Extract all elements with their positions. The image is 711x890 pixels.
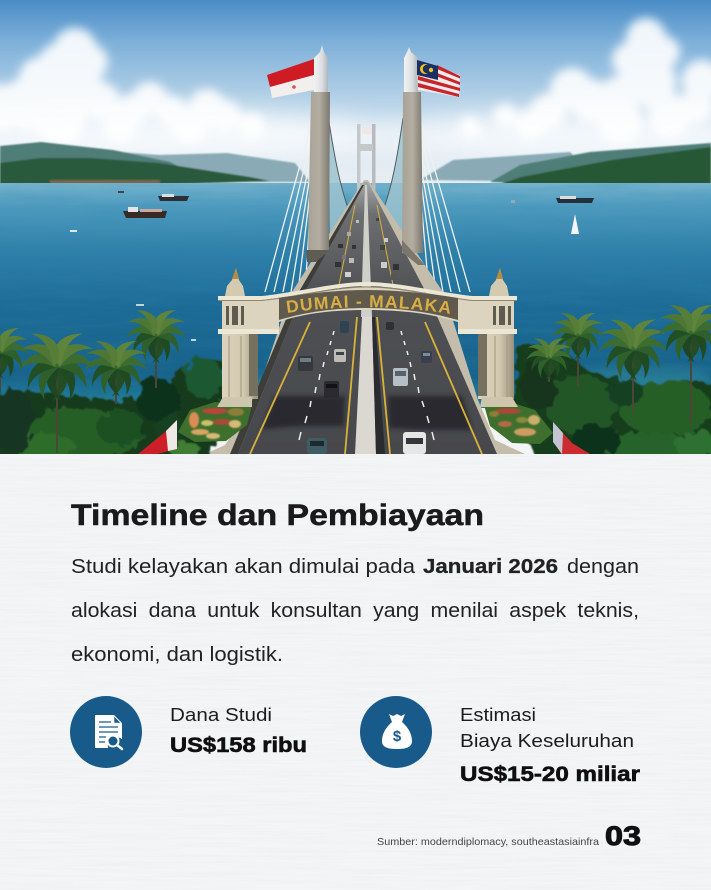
body text: ekonomi, dan logistik. [71, 644, 283, 666]
page number: 03 [605, 821, 641, 851]
paper panel [0, 454, 711, 890]
foreground foliage right [514, 345, 711, 475]
clouds [0, 18, 711, 157]
left pier [217, 333, 258, 407]
icon: money bag: $ [393, 728, 402, 745]
body text: Januari 2026 [423, 556, 558, 578]
cars [298, 218, 432, 454]
label: Estimasi [460, 705, 536, 725]
gateway arch [217, 268, 518, 407]
sign text [287, 307, 451, 314]
hero photo: bridge scene [0, 0, 711, 454]
value: US$158 ribu [170, 734, 307, 757]
foreground foliage left [0, 358, 224, 475]
flag: Indonesia [267, 59, 314, 98]
right pier [478, 333, 518, 407]
source: Sumber: moderndiplomacy, southeastasiainfra [377, 836, 599, 848]
finials [225, 268, 509, 296]
gateway arch: DUMAI - MALAKA [286, 295, 450, 314]
body text: Studi kelayakan akan dimulai pada [71, 556, 416, 578]
label: Dana Studi [170, 705, 272, 725]
body text [71, 556, 639, 666]
arch body [222, 287, 514, 332]
bridge cables [265, 122, 470, 292]
sky [0, 0, 711, 185]
icon: document search [70, 696, 142, 768]
stat: Estimasi Biaya Keseluruhan [360, 696, 640, 786]
title: Timeline dan Pembiayaan [71, 499, 484, 532]
arch windows [226, 306, 511, 325]
suspension sheets and far tower [329, 118, 403, 235]
sea [0, 183, 711, 417]
sign plate [279, 290, 458, 320]
roadside flags [138, 420, 590, 454]
palm trees [0, 298, 711, 453]
value: US$15-20 miliar [460, 763, 640, 786]
label: Biaya Keseluruhan [460, 731, 634, 751]
right tower [402, 47, 425, 265]
lane markings [250, 205, 482, 454]
flag: Malaysia [417, 60, 460, 97]
stat: Dana Studi [70, 696, 307, 768]
flower beds [178, 402, 553, 444]
body text: alokasi dana untuk konsultan yang menilai aspek teknis, [71, 600, 639, 622]
bridge deck [205, 180, 525, 454]
ships [70, 191, 594, 341]
left tower [306, 45, 330, 262]
body text: dengan [567, 556, 639, 578]
label [460, 705, 634, 751]
icon: money bag [360, 696, 432, 768]
road shadows [262, 396, 345, 429]
far hills [0, 142, 711, 190]
